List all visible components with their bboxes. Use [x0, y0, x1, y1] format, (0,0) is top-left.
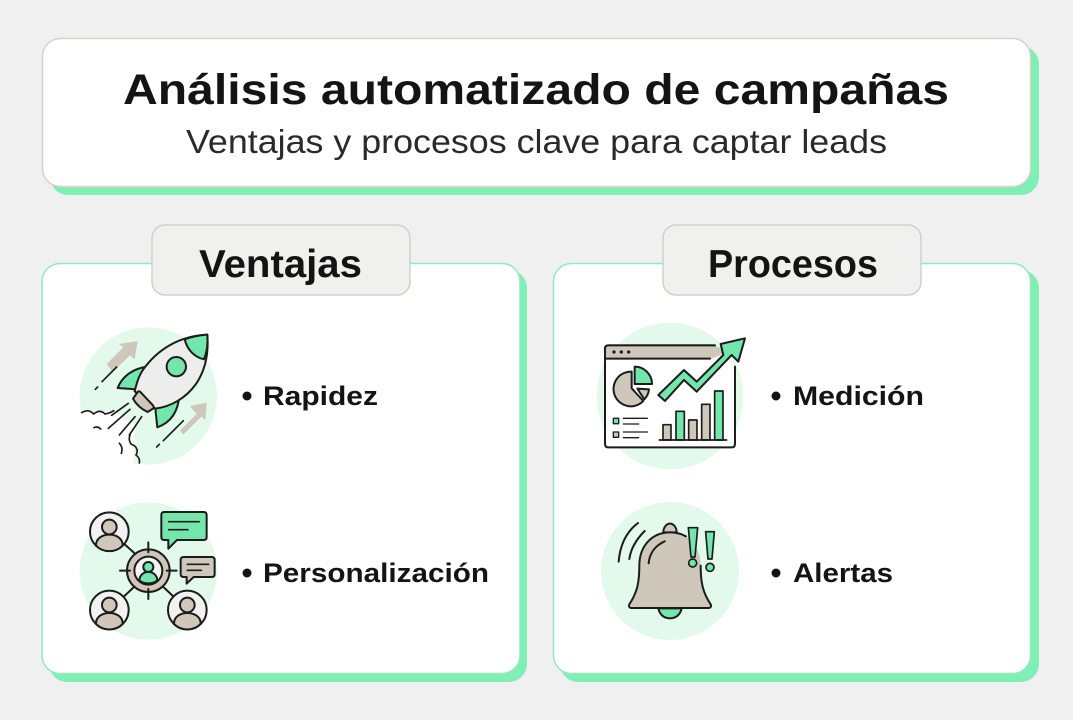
bullet: alertas: Alertas — [793, 558, 893, 588]
icon: analytics dashboard — [597, 323, 745, 469]
bullet: rapidez: Rapidez — [263, 381, 378, 411]
bullet: personalización: Personalización — [263, 558, 489, 588]
title: Análisis automatizado de campañas — [123, 66, 949, 114]
heading: ventajas — [152, 225, 410, 295]
heading: ventajas: Ventajas — [199, 243, 362, 286]
title panel — [42, 38, 1039, 195]
icon: rocket — [78, 327, 217, 465]
subtitle: Ventajas y procesos clave para captar leads — [186, 123, 887, 160]
panel: procesos — [554, 225, 1039, 682]
panel: ventajas — [42, 225, 527, 682]
heading: procesos: Procesos — [708, 243, 878, 286]
heading: procesos — [663, 225, 921, 295]
bullet: medición: Medición — [793, 381, 924, 411]
icon: alert bell — [601, 502, 739, 640]
icon: personalization network — [80, 502, 217, 640]
